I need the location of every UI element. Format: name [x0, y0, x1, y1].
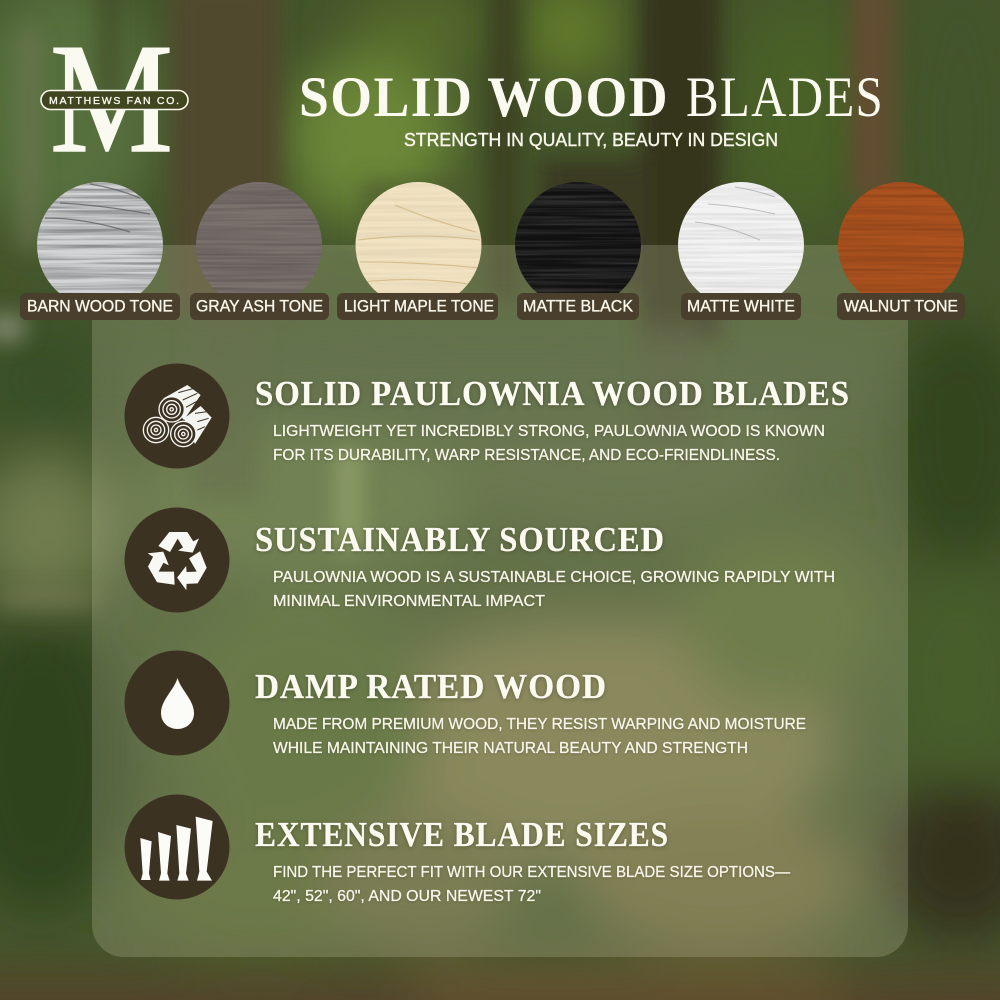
description: FIND THE PERFECT FIT WITH OUR EXTENSIVE BLADE SIZE OPTIONS— [273, 864, 790, 881]
swatch: walnut tone [837, 182, 965, 320]
logo: Matthews Fan Co.: M [50, 11, 173, 185]
swatch: matte black [515, 182, 641, 320]
swatch: walnut tone: WALNUT TONE [844, 298, 958, 316]
description: 42", 52", 60", AND OUR NEWEST 72" [273, 888, 541, 905]
heading: DAMP RATED WOOD [255, 667, 607, 706]
icon: logs [124, 364, 230, 468]
swatch: gray ash tone: GRAY ASH TONE [196, 298, 323, 316]
heading: SOLID PAULOWNIA WOOD BLADES [255, 374, 850, 413]
heading: EXTENSIVE BLADE SIZES [255, 815, 669, 854]
feature: damp rated wood [124, 650, 806, 757]
description [273, 716, 806, 757]
description [273, 864, 790, 905]
swatch: barn wood tone [20, 182, 180, 320]
icon: water drop [124, 650, 230, 756]
translucent content panel [92, 245, 908, 957]
swatch: matte white: MATTE WHITE [687, 298, 795, 316]
swatch: light maple tone [337, 182, 498, 320]
description: FOR ITS DURABILITY, WARP RESISTANCE, AND ECO-FRIENDLINESS. [273, 447, 780, 464]
subtitle: STRENGTH IN QUALITY, BEAUTY IN DESIGN [404, 129, 778, 150]
swatch: matte white [678, 182, 804, 320]
title: BLADES [686, 66, 884, 129]
logo: Matthews Fan Co.: MATTHEWS FAN CO. [49, 95, 179, 107]
swatch: barn wood tone: BARN WOOD TONE [27, 298, 173, 316]
description [273, 569, 835, 610]
icon: fan blades [124, 794, 230, 900]
feature: extensive blade sizes [124, 794, 790, 905]
swatch: gray ash tone [190, 182, 329, 320]
heading: SUSTAINABLY SOURCED [255, 520, 665, 559]
feature: solid paulownia wood blades [124, 364, 850, 468]
description: WHILE MAINTAINING THEIR NATURAL BEAUTY AND STRENGTH [273, 740, 748, 757]
swatch: light maple tone: LIGHT MAPLE TONE [344, 298, 494, 316]
swatch: matte black: MATTE BLACK [523, 298, 633, 316]
title: SOLID WOOD [299, 66, 669, 129]
description: PAULOWNIA WOOD IS A SUSTAINABLE CHOICE, GROWING RAPIDLY WITH [273, 569, 835, 586]
description: MADE FROM PREMIUM WOOD, THEY RESIST WARPING AND MOISTURE [273, 716, 806, 733]
description: LIGHTWEIGHT YET INCREDIBLY STRONG, PAULOWNIA WOOD IS KNOWN [273, 423, 825, 440]
title [299, 66, 884, 129]
description: MINIMAL ENVIRONMENTAL IMPACT [273, 593, 545, 610]
icon: recycle [124, 508, 230, 612]
feature: sustainably sourced [124, 508, 835, 612]
description [273, 423, 825, 464]
